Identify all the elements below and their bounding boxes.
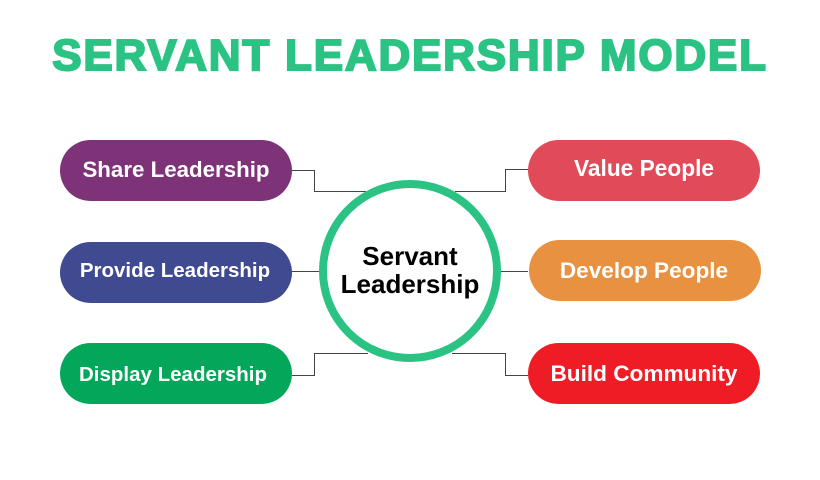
panel: Build Community <box>528 343 760 404</box>
panel: Provide Leadership <box>60 242 292 303</box>
panel: Develop People: Develop People <box>560 258 728 283</box>
panel: Value People: Value People <box>574 155 714 181</box>
panel: Provide Leadership: Provide Leadership <box>80 259 270 282</box>
center circle: Servant Leadership <box>319 180 501 362</box>
panel: Value People <box>528 140 760 201</box>
panel: Share Leadership <box>60 140 292 201</box>
panel: Build Community: Build Community <box>550 361 738 386</box>
panel: Share Leadership: Share Leadership <box>82 157 270 182</box>
center circle: Servant Leadership: Leadership <box>341 269 479 299</box>
center circle: Servant Leadership: Servant <box>362 241 458 271</box>
panel: Develop People <box>529 240 761 301</box>
panel: Display Leadership: Display Leadership <box>79 363 267 386</box>
title: SERVANT LEADERSHIP MODEL <box>52 31 768 80</box>
panel: Display Leadership <box>60 343 292 404</box>
